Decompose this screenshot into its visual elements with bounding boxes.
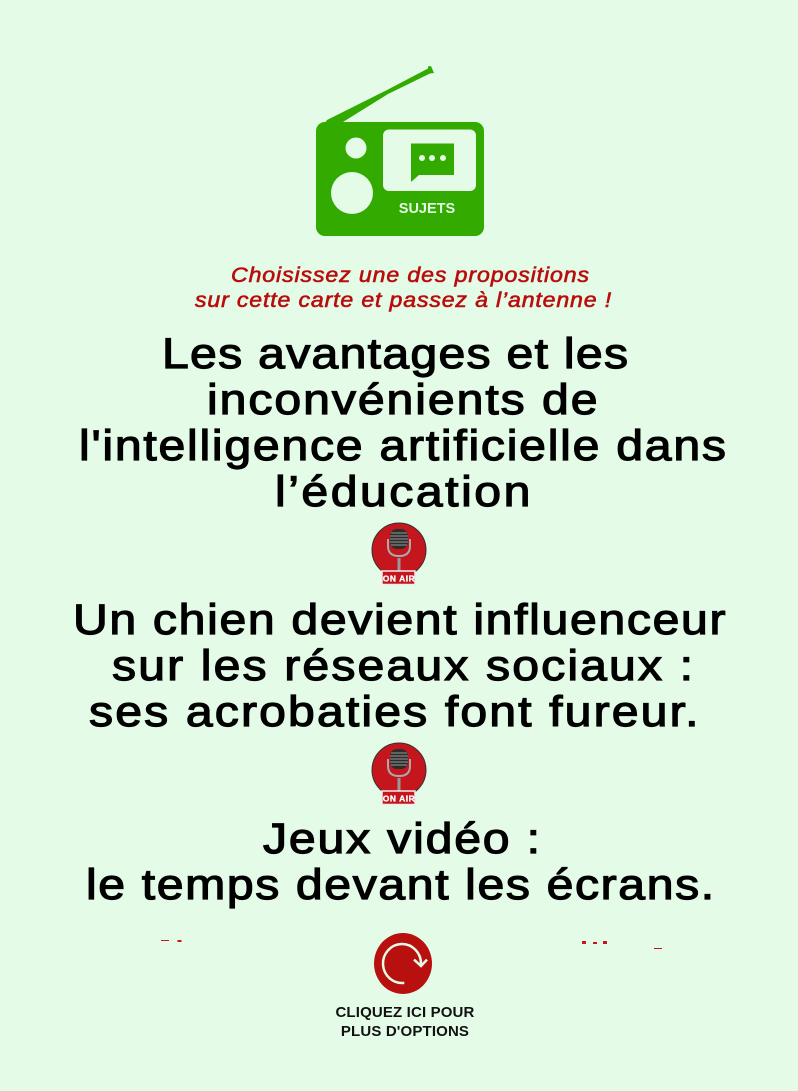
call to action line 1: CLIQUEZ ICI POUR [335, 1004, 475, 1021]
topic 1 heading: Les avantages et les [162, 330, 629, 378]
screen [383, 130, 476, 191]
topic 1 heading: l'intelligence artificielle dans [79, 422, 728, 470]
topic 3 heading [86, 815, 716, 909]
topic 2 heading: sur les réseaux sociaux : [112, 642, 695, 690]
topic 2 heading [73, 596, 727, 736]
topic 3 heading: le temps devant les écrans. [86, 861, 716, 909]
icon: on air microphone 2 [372, 742, 426, 805]
topic 1 heading: l’éducation [275, 468, 533, 516]
icon: on air microphone 1: ON AIR [383, 574, 415, 584]
intro text line 2: sur cette carte et passez à l’antenne ! [195, 289, 612, 312]
call to action line 2: PLUS D'OPTIONS [341, 1023, 469, 1040]
icon: on air microphone 2: ON AIR [383, 794, 415, 804]
icon: red refresh button [374, 933, 432, 994]
clipped red text remnants [161, 940, 662, 949]
small speaker [346, 138, 366, 158]
icon: green radio with speech bubble [316, 66, 484, 236]
topic 2 heading: Un chien devient influenceur [73, 596, 727, 644]
icon: on air microphone 1 [372, 522, 426, 585]
topic 3 heading: Jeux vidéo : [263, 815, 542, 863]
intro text line 1: Choisissez une des propositions [231, 264, 590, 287]
radio body [316, 122, 484, 236]
topic 1 heading: inconvénients de [207, 376, 599, 424]
topic 1 heading [79, 330, 728, 516]
speech bubble [411, 144, 454, 182]
large speaker [331, 172, 373, 214]
bubble dots [419, 155, 446, 161]
radio label: SUJETS [399, 201, 456, 217]
topic 2 heading: ses acrobaties font fureur. [89, 688, 701, 736]
radio antenna [325, 66, 434, 123]
